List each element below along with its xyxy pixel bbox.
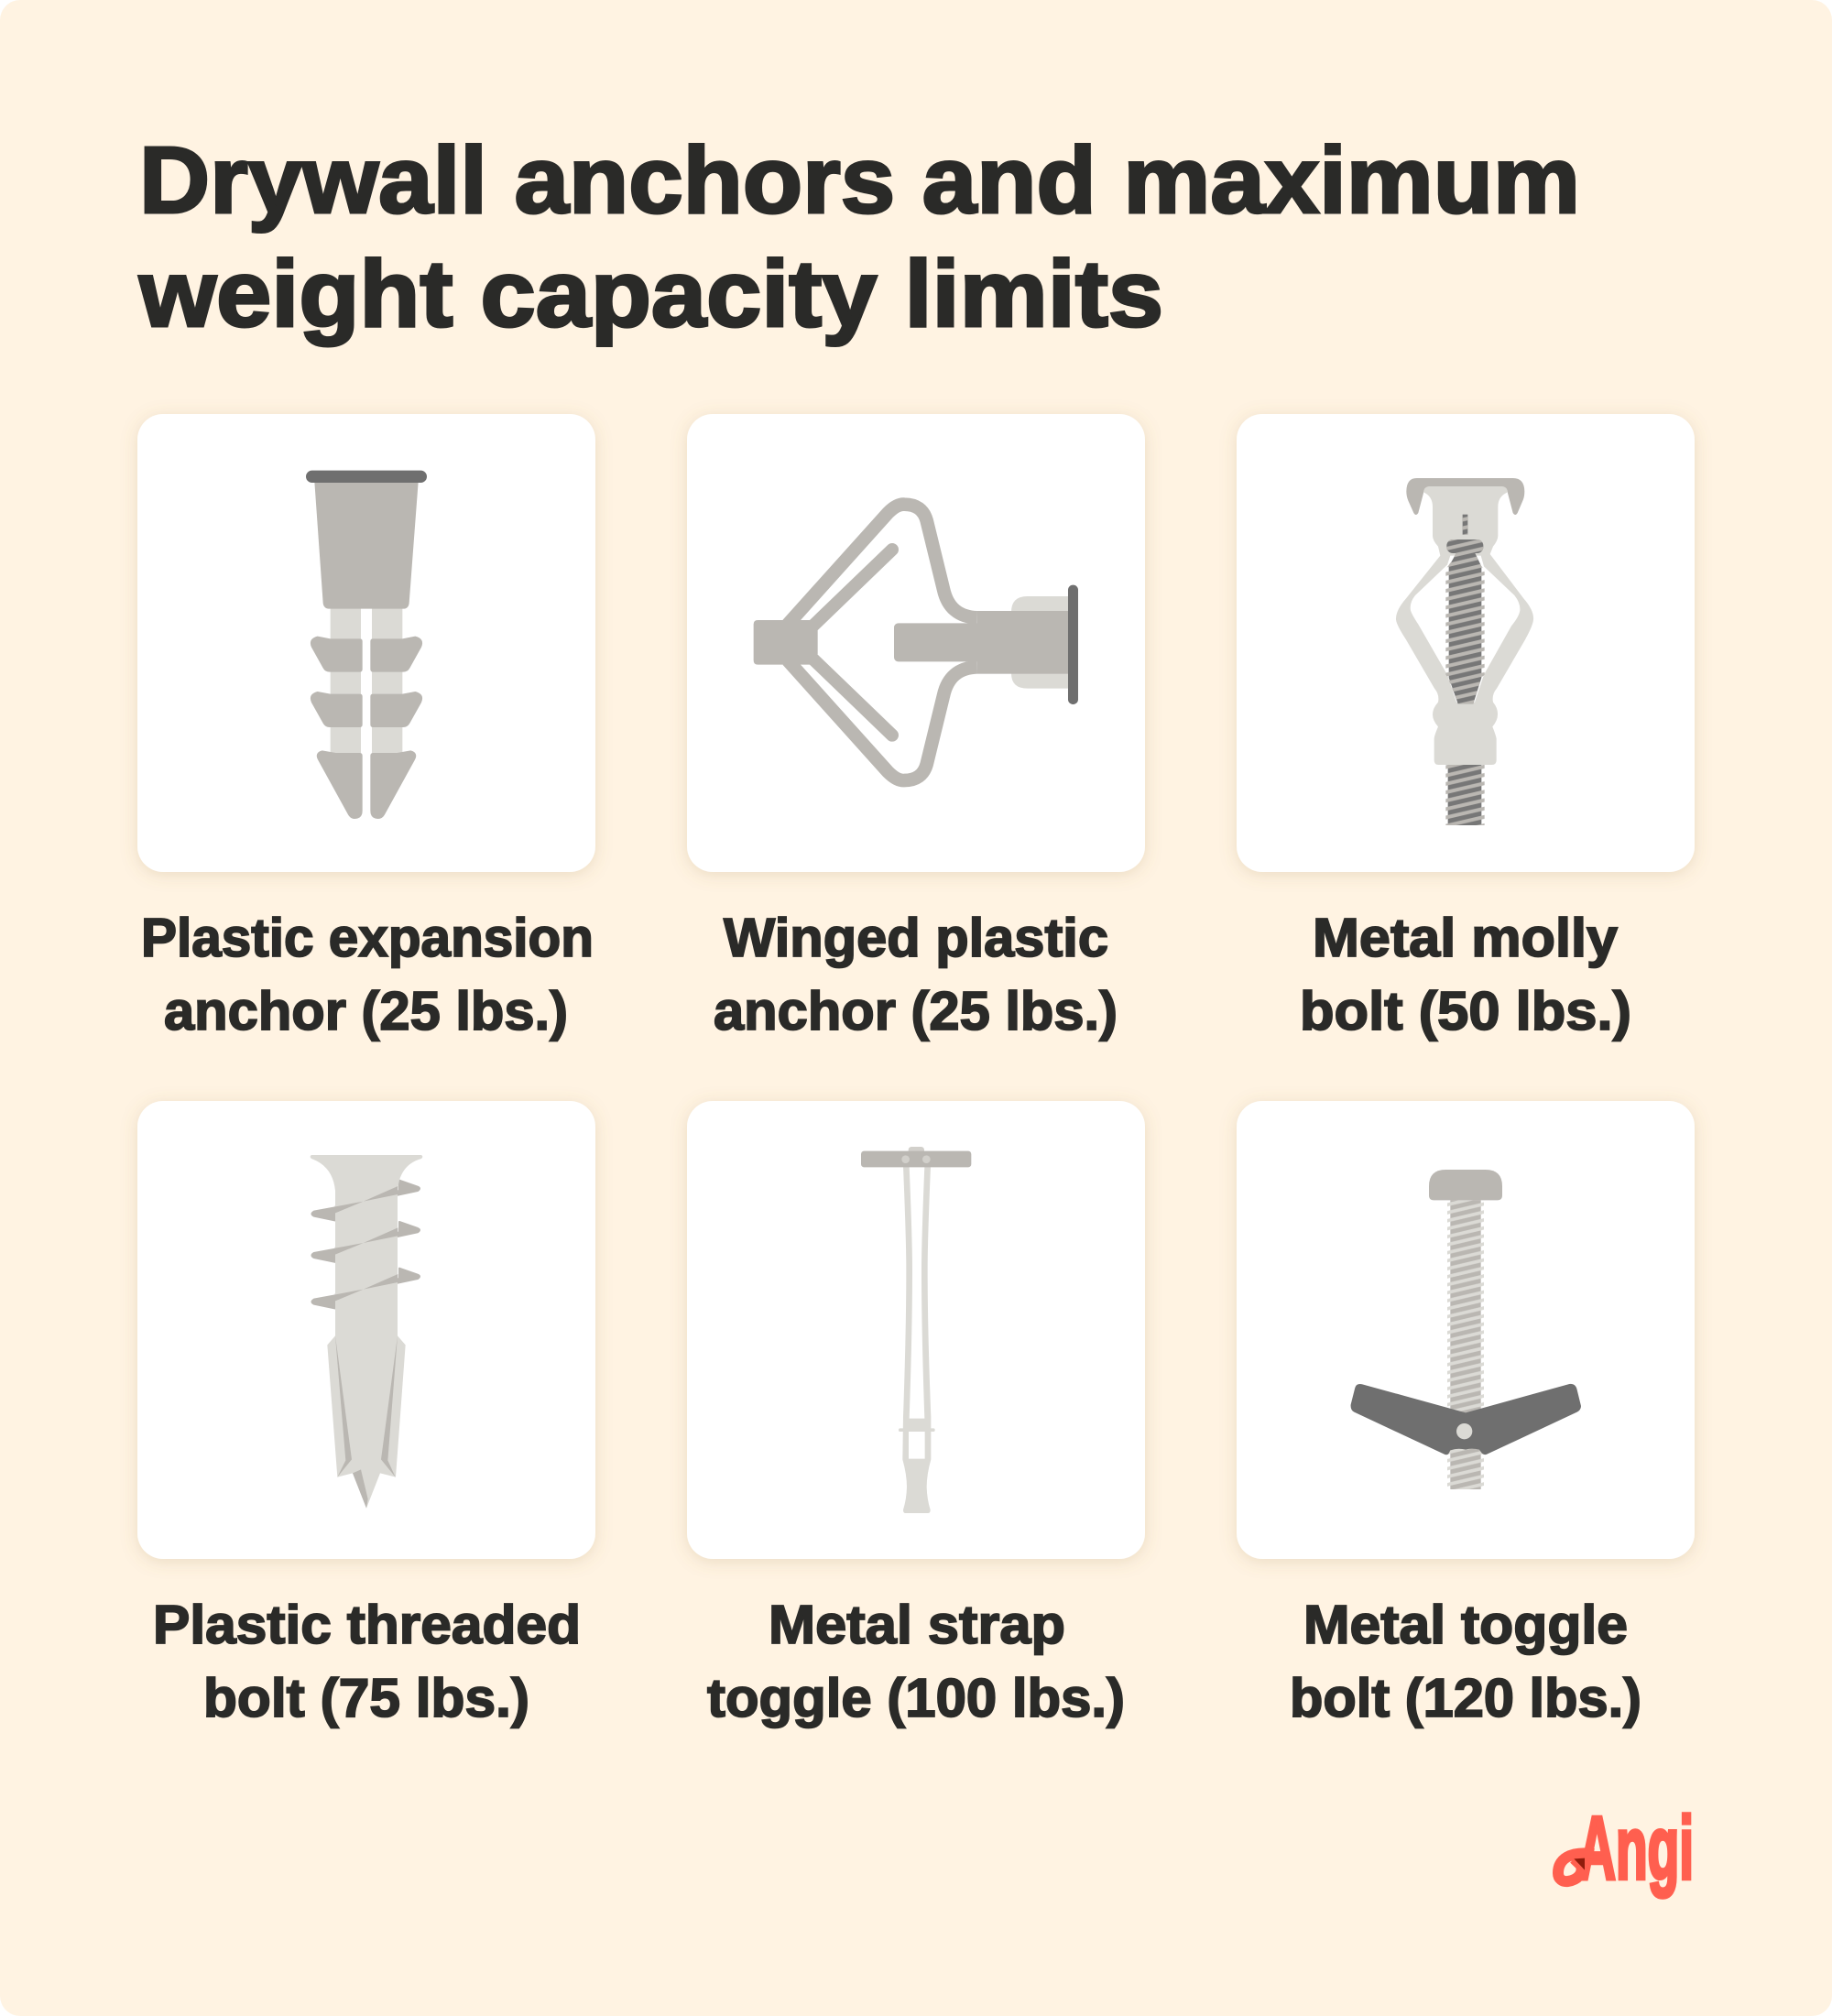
label: metal molly bolt: bolt (50 lbs.) xyxy=(1300,981,1631,1041)
icon: metal toggle bolt xyxy=(1351,1170,1581,1489)
panel: metal toggle bolt xyxy=(1237,1101,1695,1728)
label: plastic threaded bolt: bolt (75 lbs.) xyxy=(203,1668,529,1728)
label: plastic threaded bolt xyxy=(153,1595,581,1728)
panel: plastic threaded bolt xyxy=(137,1101,595,1728)
logo: Angi xyxy=(1558,1798,1694,1898)
label: plastic threaded bolt: Plastic threaded xyxy=(153,1595,581,1655)
label: winged plastic anchor: anchor (25 lbs.) xyxy=(714,981,1118,1041)
icon: metal strap toggle xyxy=(861,1147,971,1513)
label: plastic expansion anchor: Plastic expansion xyxy=(141,908,594,968)
label: winged plastic anchor: Winged plastic xyxy=(724,908,1108,968)
label: metal molly bolt xyxy=(1300,908,1631,1041)
icon: metal molly bolt xyxy=(1396,478,1533,825)
panel: metal strap toggle xyxy=(687,1101,1145,1728)
panel: winged plastic anchor xyxy=(687,414,1145,1041)
label: winged plastic anchor xyxy=(714,908,1118,1041)
label: plastic expansion anchor: anchor (25 lbs.) xyxy=(164,981,568,1041)
title: weight capacity limits xyxy=(138,241,1163,346)
label: metal toggle bolt: Metal toggle xyxy=(1303,1595,1628,1655)
label: metal strap toggle: toggle (100 lbs.) xyxy=(707,1668,1125,1728)
label: metal toggle bolt: bolt (120 lbs.) xyxy=(1290,1668,1641,1728)
label: metal strap toggle xyxy=(707,1595,1125,1728)
title: Drywall anchors and maximum xyxy=(139,127,1580,233)
label: plastic expansion anchor xyxy=(141,908,594,1041)
logo: Angi: Angi xyxy=(1578,1798,1694,1898)
label: metal toggle bolt xyxy=(1290,1595,1641,1728)
label: metal molly bolt: Metal molly xyxy=(1313,908,1618,968)
label: metal strap toggle: Metal strap xyxy=(769,1595,1065,1655)
icon: winged plastic anchor xyxy=(754,505,1078,780)
panel: metal molly bolt xyxy=(1237,414,1695,1041)
icon: plastic expansion anchor xyxy=(306,471,427,819)
panel: plastic expansion anchor xyxy=(137,414,595,1041)
title xyxy=(138,127,1580,346)
icon: plastic threaded bolt xyxy=(311,1155,422,1509)
